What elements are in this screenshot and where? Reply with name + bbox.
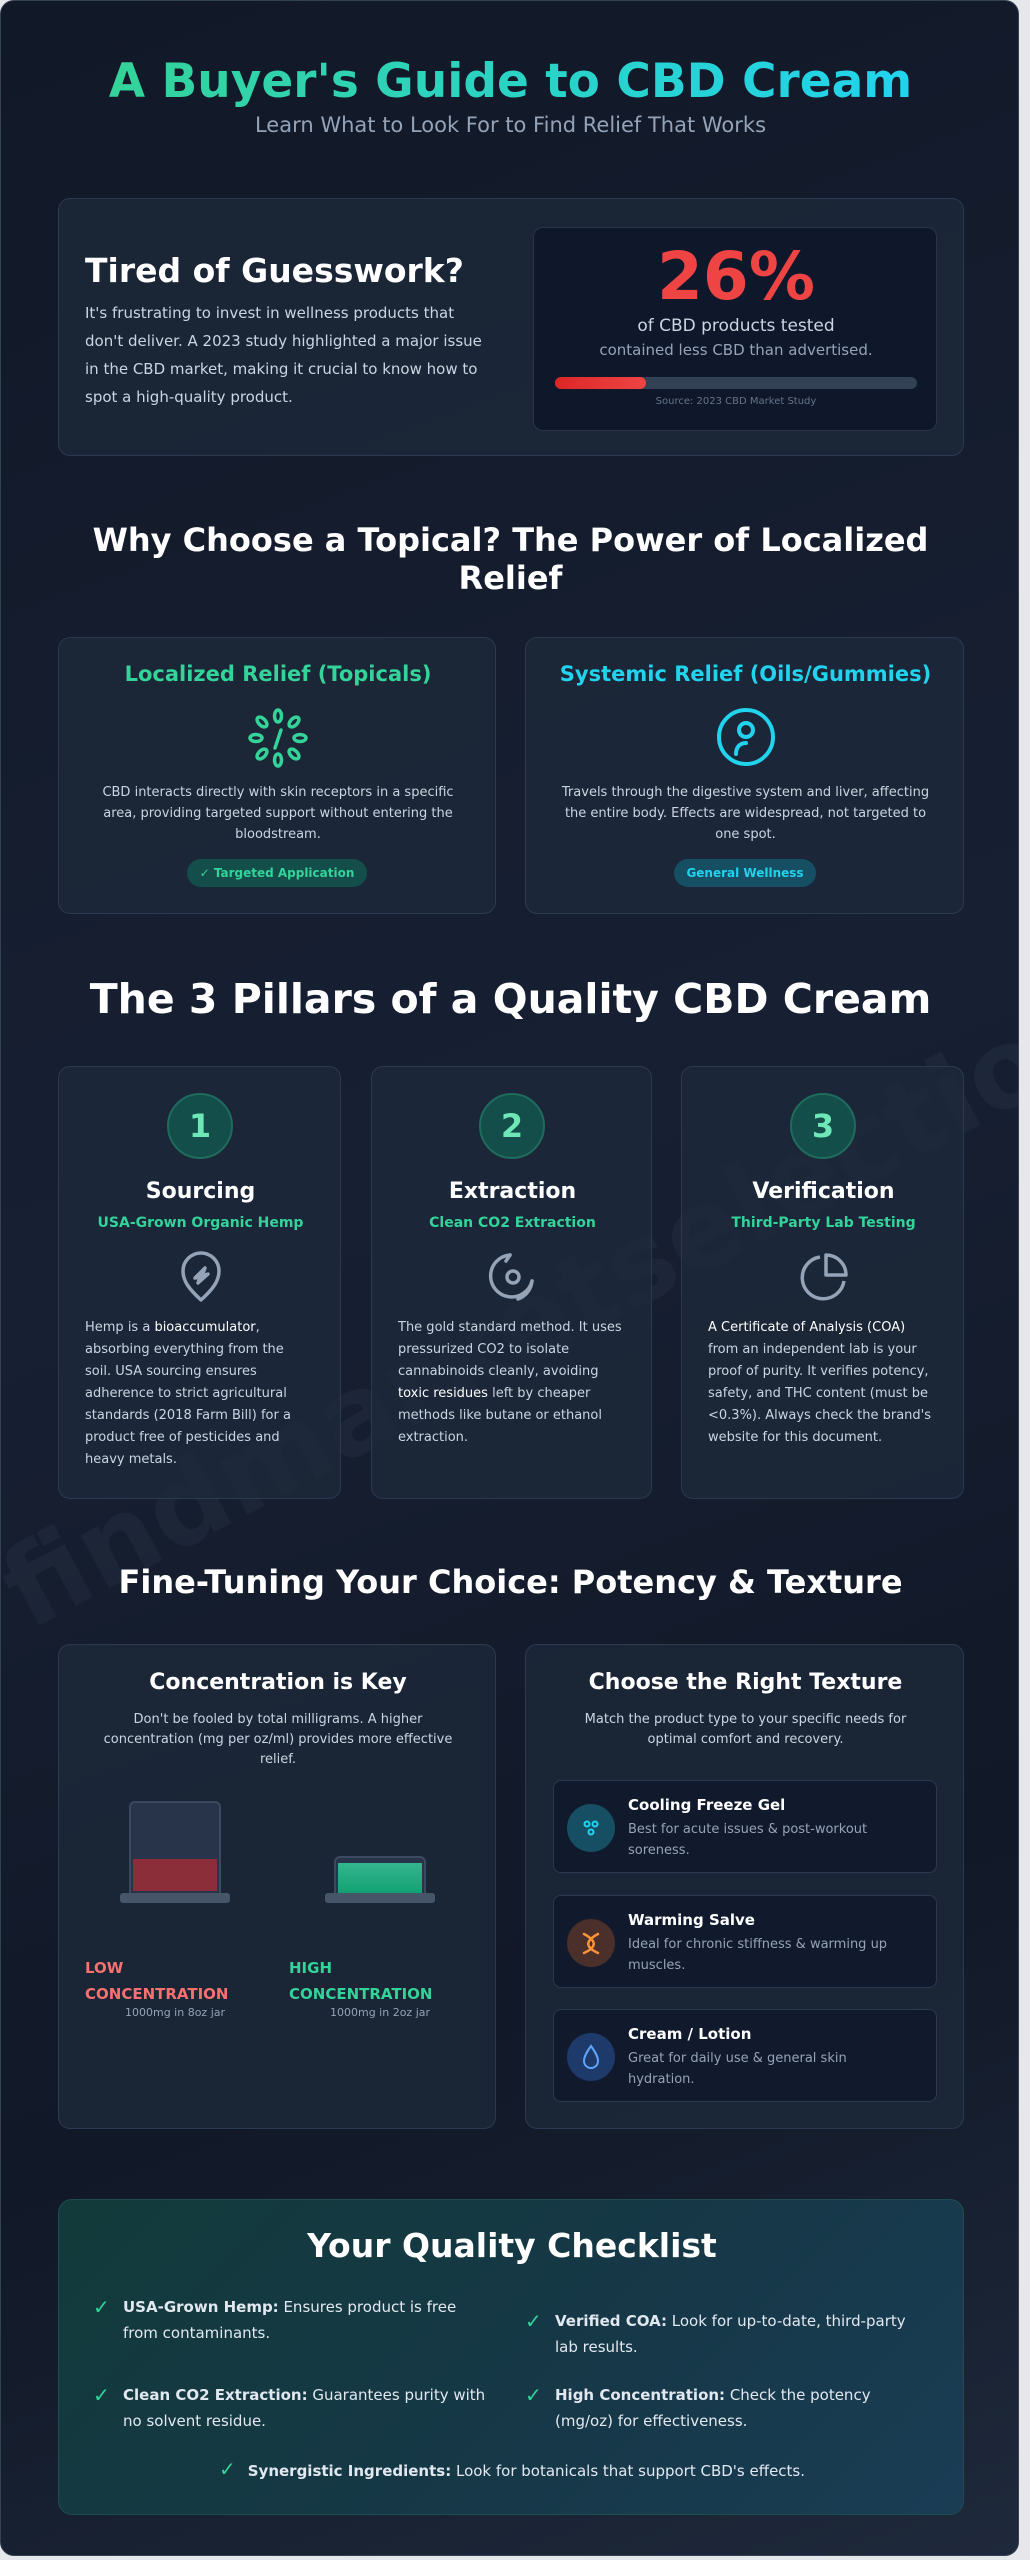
caption high: 1000mg in 2oz jar — [330, 2006, 430, 2019]
jar: high — [334, 1856, 426, 1899]
text: A Certificate of Analysis (COA) from an independent lab is your proof of purity. It verifies potency, safety, and THC content (must be <0.3%). Always check the brand's website for this document. — [708, 1320, 931, 1445]
text: CBD interacts directly with skin receptors in a specific area, providing targeted support without entering the bloodstream. — [102, 785, 454, 842]
stat caption: of CBD products tested — [637, 316, 835, 336]
icon: refresh — [488, 1253, 534, 1301]
stat number: 26% — [657, 238, 815, 315]
text: Travels through the digestive system and liver, affecting the entire body. Effects are widespread, not targeted to one spot. — [562, 785, 929, 842]
pill: targeted application: ✓ Targeted Application — [200, 866, 354, 880]
label: low concentration — [85, 1959, 228, 2003]
heading: fine tuning: Fine-Tuning Your Choice: Potency & Texture — [118, 1563, 903, 1601]
pill: general wellness — [674, 859, 816, 887]
heading: why topical: Relief — [459, 559, 562, 597]
item title: Cream / Lotion — [628, 2025, 751, 2043]
icon: pie chart — [800, 1253, 848, 1300]
label: high concentration: HIGH — [289, 1959, 332, 1977]
checklist title: Your Quality Checklist — [307, 2226, 717, 2265]
item: usa hemp: ✓ — [93, 2295, 110, 2319]
text: Hemp is a bioaccumulator, absorbing everything from the soil. USA sourcing ensures adherence to strict agricultural standards (2018 Farm Bill) for a product free of pesticides and heavy metals. — [85, 1320, 291, 1467]
pillar name: Verification — [752, 1179, 895, 1204]
pillar sub: Third-Party Lab Testing — [731, 1215, 916, 1231]
heading: 3 pillars: The 3 Pillars of a Quality CBD Cream — [90, 975, 931, 1023]
item: warming salve — [553, 1895, 937, 1988]
panel: localized relief — [58, 637, 496, 914]
number badge — [479, 1093, 545, 1159]
stat subcaption: contained less CBD than advertised. — [599, 341, 873, 359]
number badge: 2 — [501, 1107, 523, 1145]
heading: why topical: Why Choose a Topical? The Power of Localized — [93, 521, 928, 559]
panel: systemic relief — [525, 637, 964, 914]
panel title: Choose the Right Texture — [589, 1670, 902, 1695]
number badge: 3 — [812, 1107, 834, 1145]
icon: location leaf — [181, 1251, 221, 1302]
jar: low — [129, 1801, 221, 1899]
label: low concentration: LOW — [85, 1959, 123, 1977]
source: Source: 2023 CBD Market Study — [656, 396, 816, 407]
pillar name: Extraction — [449, 1179, 576, 1204]
pill: general wellness: General Wellness — [686, 866, 804, 880]
card title: Systemic Relief (Oils/Gummies) — [560, 662, 931, 686]
panel: texture — [525, 1644, 964, 2129]
icon: targeted burst — [248, 708, 308, 768]
panel: concentration — [58, 1644, 496, 2129]
panel: checklist — [58, 2199, 964, 2515]
pillar sub: USA-Grown Organic Hemp — [98, 1215, 303, 1231]
text: Don't be fooled by total milligrams. A higher concentration (mg per oz/ml) provides more effective relief. — [104, 1712, 452, 1767]
item: co2: Clean CO2 Extraction: Guarantees purity with no solvent residue. — [123, 2386, 485, 2430]
pillar sub: Clean CO2 Extraction — [429, 1215, 596, 1231]
item: usa hemp: USA-Grown Hemp: Ensures product is free from contaminants. — [123, 2298, 456, 2342]
item: co2: ✓ — [93, 2383, 110, 2407]
text: The gold standard method. It uses pressurized CO2 to isolate cannabinoids cleanly, avoiding toxic residues left by cheaper methods like butane or ethanol extraction. — [398, 1320, 622, 1445]
pillar name: Sourcing — [146, 1179, 255, 1204]
panel title: Concentration is Key — [149, 1670, 407, 1695]
item: synergistic: ✓ Synergistic Ingredients: Look for botanicals that support CBD's effects. — [219, 2457, 805, 2481]
item: high concentration: High Concentration: Check the potency (mg/oz) for effectiveness. — [555, 2386, 871, 2430]
icon: person circle — [717, 708, 775, 766]
item desc: Great for daily use & general skin hydration. — [628, 2051, 847, 2087]
icon: drop — [567, 2033, 615, 2081]
heading: tired of guesswork: Tired of Guesswork? — [85, 251, 464, 290]
panel: pillar 2 extraction — [371, 1066, 652, 1499]
subtitle: Learn What to Look For to Find Relief That Works — [255, 113, 766, 137]
icon: gel dots — [567, 1804, 615, 1852]
heading: why topical — [93, 521, 928, 597]
text: Match the product type to your specific needs for optimal comfort and recovery. — [585, 1712, 906, 1747]
panel: pillar 1 sourcing — [58, 1066, 341, 1499]
item title: Cooling Freeze Gel — [628, 1796, 785, 1814]
number badge — [790, 1093, 856, 1159]
item: cream lotion — [553, 2009, 937, 2102]
progress bar — [555, 377, 917, 389]
label: high concentration: CONCENTRATION — [289, 1985, 432, 2003]
item desc: Best for acute issues & post-workout soreness. — [628, 1822, 867, 1858]
number badge — [167, 1093, 233, 1159]
icon: warm — [567, 1919, 615, 1967]
chart: jars — [120, 1801, 435, 1903]
caption low: 1000mg in 8oz jar — [125, 2006, 225, 2019]
panel: tired of guesswork — [58, 198, 964, 456]
item: high concentration: ✓ — [525, 2383, 542, 2407]
pill: targeted application — [187, 859, 367, 887]
title: A Buyer's Guide to CBD Cream — [109, 54, 912, 109]
item: verified coa: Verified COA: Look for up-to-date, third-party lab results. — [555, 2312, 906, 2356]
item: verified coa: ✓ — [525, 2309, 542, 2333]
item title: Warming Salve — [628, 1911, 755, 1929]
label: high concentration — [289, 1959, 432, 2003]
number badge: 1 — [189, 1107, 211, 1145]
panel: pillar 3 verification — [681, 1066, 964, 1499]
stat box: 26% — [533, 227, 937, 431]
item desc: Ideal for chronic stiffness & warming up muscles. — [628, 1937, 887, 1973]
text: intro: It's frustrating to invest in wellness products that don't deliver. A 2023 study highlighted a major issue in the CBD market, making it crucial to know how to spot a high-quality product. — [85, 304, 482, 406]
card title: Localized Relief (Topicals) — [125, 662, 431, 686]
label: low concentration: CONCENTRATION — [85, 1985, 228, 2003]
item: cooling gel — [553, 1780, 937, 1873]
